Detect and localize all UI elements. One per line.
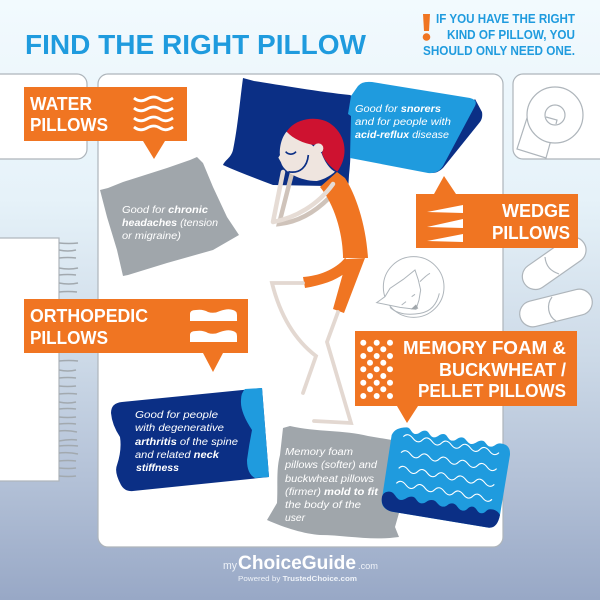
footer logo: my — [223, 560, 237, 572]
head — [278, 119, 345, 181]
text: wedge pillow benefit — [355, 104, 451, 141]
tagline: SHOULD ONLY NEED ONE. — [423, 43, 575, 58]
icon: capsule pill lower — [517, 286, 595, 330]
text: water pillow benefit: headaches (tension — [122, 218, 218, 229]
icon: toilet roll — [517, 87, 583, 158]
tagline: KIND OF PILLOW, YOU — [447, 27, 575, 42]
icon: capsule pill upper — [517, 232, 591, 295]
icon: water waves — [134, 97, 173, 130]
label: water pillows — [30, 94, 108, 135]
label: memory foam and buckwheat: PELLET PILLOWS — [418, 381, 566, 401]
icon: pellets — [360, 340, 393, 399]
label: orthopedic pillows: ORTHOPEDIC — [30, 306, 148, 326]
pillow: gray water pillow — [100, 157, 239, 276]
label: water pillows: PILLOWS — [30, 115, 108, 135]
callout: wedge pillows — [416, 176, 578, 248]
label: orthopedic pillows: PILLOWS — [30, 328, 108, 348]
tagline — [423, 11, 575, 58]
label: wedge pillows — [492, 201, 570, 243]
label: orthopedic pillows — [30, 306, 148, 348]
text: memory foam benefit: the body of the — [285, 500, 361, 511]
front arm — [273, 172, 333, 222]
text: water pillow benefit — [122, 205, 218, 242]
lower torso and thigh — [303, 258, 365, 313]
panel: main bed — [98, 74, 503, 547]
text: wedge pillow benefit: acid-reflux disease — [355, 130, 449, 141]
text: water pillow benefit: or migraine) — [122, 231, 181, 242]
text: orthopedic benefit — [135, 410, 238, 474]
text: memory foam benefit: (firmer) mold to fit — [285, 487, 379, 498]
label: memory foam and buckwheat — [403, 338, 566, 401]
text: memory foam benefit: buckwheat pillows — [285, 474, 374, 485]
title: FIND THE RIGHT PILLOW — [25, 29, 367, 60]
text: orthopedic benefit: and related neck — [135, 450, 219, 461]
pillow: blue wedge — [348, 82, 482, 173]
panel: top right room — [513, 74, 600, 159]
torso — [320, 172, 368, 258]
character: sleeping person — [272, 119, 368, 423]
label: water pillows: WATER — [30, 94, 92, 114]
footer logo: .com — [358, 561, 378, 572]
text: orthopedic benefit: with degenerative — [135, 423, 224, 434]
text: memory foam benefit: pillows (softer) and — [284, 460, 377, 471]
tagline: IF YOU HAVE THE RIGHT — [436, 11, 575, 26]
icon: sleeping cat — [377, 257, 444, 317]
label: wedge pillows: PILLOWS — [492, 223, 570, 243]
back arm — [279, 173, 329, 224]
text: memory foam benefit: Memory foam — [285, 447, 353, 458]
footer logo: ChoiceGuide — [238, 553, 356, 574]
text: wedge pillow benefit: Good for snorers — [355, 104, 441, 115]
callout: memory foam and buckwheat pillows — [355, 331, 577, 423]
pillow: orthopedic navy — [111, 388, 269, 491]
text: wedge pillow benefit: and for people with — [355, 117, 451, 128]
text: water pillow benefit: Good for chronic — [122, 205, 208, 216]
panel: top left room — [0, 74, 87, 159]
footer logo — [223, 553, 378, 583]
text: memory foam benefit — [284, 447, 379, 524]
label: wedge pillows: WEDGE — [502, 201, 570, 221]
text: orthopedic benefit: stiffness — [136, 463, 179, 474]
callout: orthopedic pillows — [24, 299, 248, 372]
icon: side coil — [59, 243, 78, 476]
callout: water pillows — [24, 87, 187, 159]
pillow: gray memory foam — [267, 426, 399, 538]
icon: exclamation mark — [423, 14, 430, 41]
text: memory foam benefit: user — [285, 513, 306, 524]
footer logo: Powered by TrustedChoice.com — [238, 574, 357, 583]
pillow: navy head pillow — [223, 78, 354, 192]
panel: left furniture — [0, 238, 59, 481]
icon: contour pillows — [190, 309, 237, 342]
label: memory foam and buckwheat: BUCKWHEAT / — [439, 360, 566, 380]
pillow: blue foam block — [382, 427, 510, 528]
label: memory foam and buckwheat: MEMORY FOAM & — [403, 338, 566, 358]
icon: wedges — [427, 205, 463, 242]
text: orthopedic benefit: arthritis of the spine — [135, 437, 238, 448]
legs — [272, 283, 351, 423]
text: orthopedic benefit: Good for people — [135, 410, 219, 421]
